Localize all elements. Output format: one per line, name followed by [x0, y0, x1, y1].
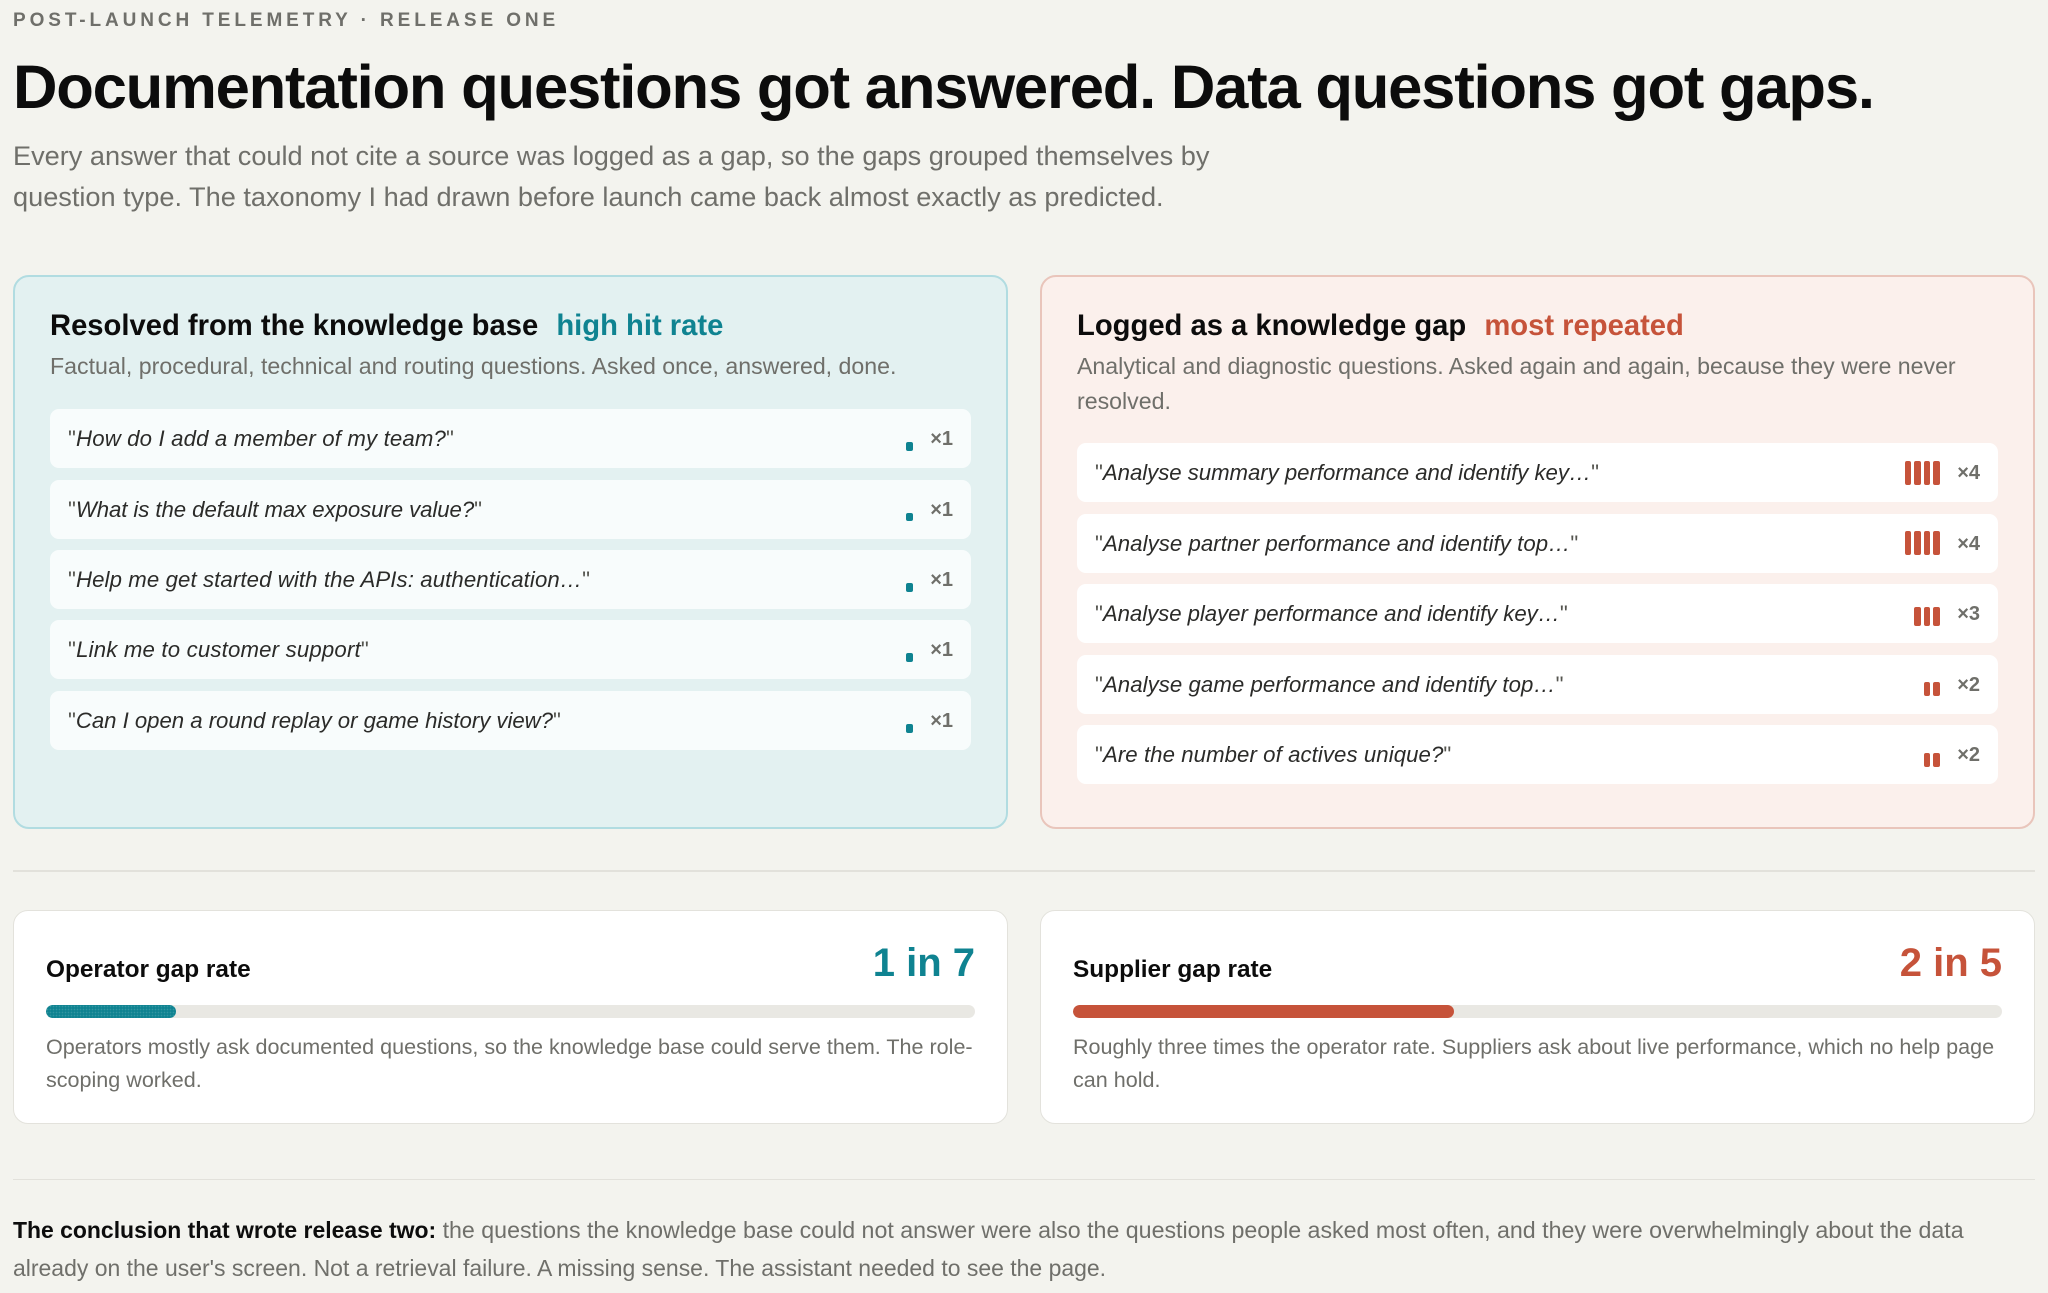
subtitle: question type. The taxonomy I had drawn before launch came back almost exactly as predicted. — [13, 180, 1164, 212]
supplier value: 2 in 5 — [1900, 941, 2002, 985]
question row 3: ×1 — [930, 569, 953, 591]
supplier progress bar — [1073, 1004, 2002, 1018]
question row 4: "Analyse game performance and identify top…" — [1095, 672, 1564, 697]
card: operator gap rate — [13, 910, 1008, 1124]
panel: logged as a knowledge gap — [1040, 275, 2035, 829]
question row 3: ×3 — [1957, 603, 1980, 625]
question row 3: "Help me get started with the APIs: authentication…" — [68, 567, 590, 592]
question row 2 — [50, 480, 971, 538]
question row 4: "Link me to customer support" — [68, 637, 369, 662]
question row 2: "Analyse partner performance and identify top…" — [1095, 531, 1578, 556]
question row 5: "Are the number of actives unique?" — [1095, 742, 1451, 767]
operator description — [46, 1034, 973, 1092]
question row 3: "Analyse player performance and identify key…" — [1095, 601, 1568, 626]
supplier description: Roughly three times the operator rate. Suppliers ask about live performance, which no help page — [1073, 1034, 1994, 1059]
operator description: scoping worked. — [46, 1067, 202, 1092]
supplier description — [1073, 1034, 1994, 1092]
subtitle — [13, 140, 1210, 212]
supplier description: can hold. — [1073, 1067, 1160, 1092]
question row 4: ×1 — [930, 639, 953, 661]
question row 4 — [50, 620, 971, 679]
panel description: logged: resolved. — [1077, 388, 1171, 414]
operator progress bar — [46, 1004, 975, 1018]
panel heading: logged: Logged as a knowledge gap most repeated — [1077, 310, 1684, 342]
eyebrow: POST-LAUNCH TELEMETRY · RELEASE ONE — [13, 10, 559, 30]
conclusion text: The conclusion that wrote release two: the questions the knowledge base could not answer were also the questions people asked most often, and they were overwhelmingly about the data — [13, 1217, 1964, 1243]
conclusion text: already on the user's screen. Not a retrieval failure. A missing sense. The assistant needed to see the page. — [13, 1254, 1106, 1280]
panel: resolved from the knowledge base — [13, 275, 1008, 829]
operator label: Operator gap rate — [46, 956, 251, 983]
question row 1 — [1077, 443, 1998, 502]
conclusion text — [13, 1217, 1964, 1281]
panel description: logged — [1077, 353, 1956, 414]
subtitle: Every answer that could not cite a source was logged as a gap, so the gaps grouped themselves by — [13, 140, 1209, 170]
operator value: 1 in 7 — [873, 941, 975, 985]
panel description: logged: Analytical and diagnostic questions. Asked again and again, because they were never — [1077, 353, 1956, 379]
question row 3 — [50, 550, 971, 609]
panel description: resolved: Factual, procedural, technical and routing questions. Asked once, answered, done. — [50, 352, 896, 378]
operator description: Operators mostly ask documented questions, so the knowledge base could serve them. The role- — [46, 1034, 973, 1059]
question row 1 — [50, 409, 971, 468]
question row 2: ×1 — [930, 498, 953, 520]
question row 2: ×4 — [1957, 532, 1980, 554]
question row 1: ×4 — [1957, 462, 1980, 484]
supplier label: Supplier gap rate — [1073, 956, 1272, 983]
question row 2 — [1077, 514, 1998, 572]
title: Documentation questions got answered. Data questions got gaps. — [13, 53, 1874, 122]
question row 4: ×2 — [1957, 674, 1980, 696]
card: supplier gap rate — [1040, 910, 2035, 1124]
question row 2: "What is the default max exposure value?" — [68, 497, 482, 522]
question row 3 — [1077, 584, 1998, 643]
question row 5: ×2 — [1957, 744, 1980, 766]
question row 1: ×1 — [930, 428, 953, 450]
question row 5: "Can I open a round replay or game history view?" — [68, 708, 561, 733]
question row 5: ×1 — [930, 710, 953, 732]
question row 4 — [1077, 654, 1998, 714]
panel heading: resolved: Resolved from the knowledge base high hit rate — [50, 310, 723, 342]
question row 5 — [1077, 725, 1998, 784]
question row 1: "How do I add a member of my team?" — [68, 426, 454, 451]
question row 5 — [50, 691, 971, 750]
question row 1: "Analyse summary performance and identify key…" — [1095, 460, 1599, 485]
